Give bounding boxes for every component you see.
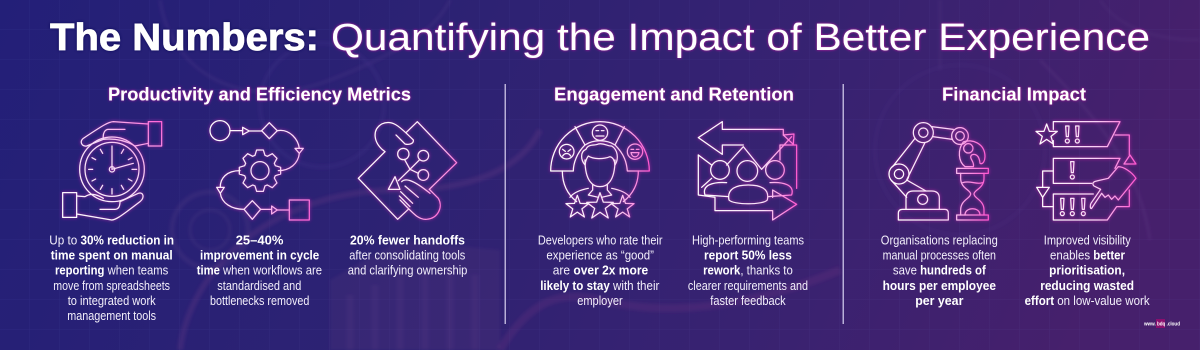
text: cycle time: 25–40% [236,232,284,248]
text: 30% reduction: to integrated work [68,293,156,308]
text: 30% reduction: Up to 30% reduction in [49,232,174,248]
text: better prioritisation [1025,232,1150,308]
text: cycle time [197,232,322,308]
panel: engagement and retention [538,84,808,308]
text: 30% reduction: reporting when teams [55,263,169,278]
icon: team with rework arrows and trend [698,122,797,220]
title [50,17,1150,59]
logo: website address [1143,319,1180,328]
divider: left [504,84,506,324]
panel: financial impact [881,84,1150,308]
text: likely to stay: are over 2x more [553,263,648,278]
heading: productivity: Productivity and Efficiency Metrics [108,84,411,104]
text: better prioritisation: reducing wasted [1040,278,1134,293]
icon: clock held by two hands [63,122,162,220]
text: fewer handoffs: after consolidating tools [349,248,466,262]
text: less rework: faster feedback [710,293,786,308]
title: Quantifying the Impact of Better Experience [331,17,1150,59]
text: hundreds of hours: Organisations replacing [881,232,998,248]
icon: developer with rating faces and stars [551,122,649,218]
text: less rework: High-performing teams [692,232,804,248]
text: likely to stay: experience as “good” [546,248,654,262]
text: fewer handoffs [348,232,467,278]
text: hundreds of hours: save hundreds of [893,263,986,278]
text: better prioritisation: Improved visibility [1044,232,1131,248]
text: likely to stay: likely to stay with their [540,278,660,293]
text: less rework [688,232,808,308]
icon: robot arm and hourglass [889,123,988,220]
text: hundreds of hours: hours per employee [883,278,996,293]
text: cycle time: time when workflows are [197,263,322,278]
panel: productivity and efficiency metrics [49,84,467,323]
text: cycle time: improvement in cycle [200,248,319,262]
text: better prioritisation: effort on low-value work [1025,293,1150,308]
title: The Numbers: [50,17,319,59]
text: better prioritisation: enables better [1050,248,1125,262]
text: fewer handoffs: 20% fewer handoffs [350,232,465,248]
text: less rework: clearer requirements and [688,278,808,293]
divider: right [842,84,844,324]
text: 30% reduction: time spent on manual [51,248,173,262]
icon: prioritised tasks with pointing hand [1036,122,1136,220]
text: hundreds of hours: per year [915,293,963,308]
text: less rework: report 50% less [704,248,792,262]
text: likely to stay: employer [577,293,623,308]
icon: workflow with gear [210,121,309,220]
text: 30% reduction [49,232,174,323]
text: hundreds of hours [881,232,998,308]
icon: touch screen with hands [358,122,457,219]
text: less rework: rework, thanks to [703,263,793,278]
text: cycle time: bottlenecks removed [210,293,309,308]
text: cycle time: standardised and [217,278,301,293]
text: better prioritisation: prioritisation, [1049,263,1125,278]
text: likely to stay: Developers who rate their [538,232,663,248]
text: 30% reduction: management tools [67,308,156,323]
logo: website address: www. bdq .cloud [1143,322,1180,328]
text: fewer handoffs: and clarifying ownership [348,263,467,278]
heading: financial impact: Financial Impact [942,84,1086,104]
heading: engagement: Engagement and Retention [554,84,794,104]
text: likely to stay [538,232,663,308]
text: hundreds of hours: manual processes often [883,248,996,262]
text: 30% reduction: move from spreadsheets [53,278,170,293]
